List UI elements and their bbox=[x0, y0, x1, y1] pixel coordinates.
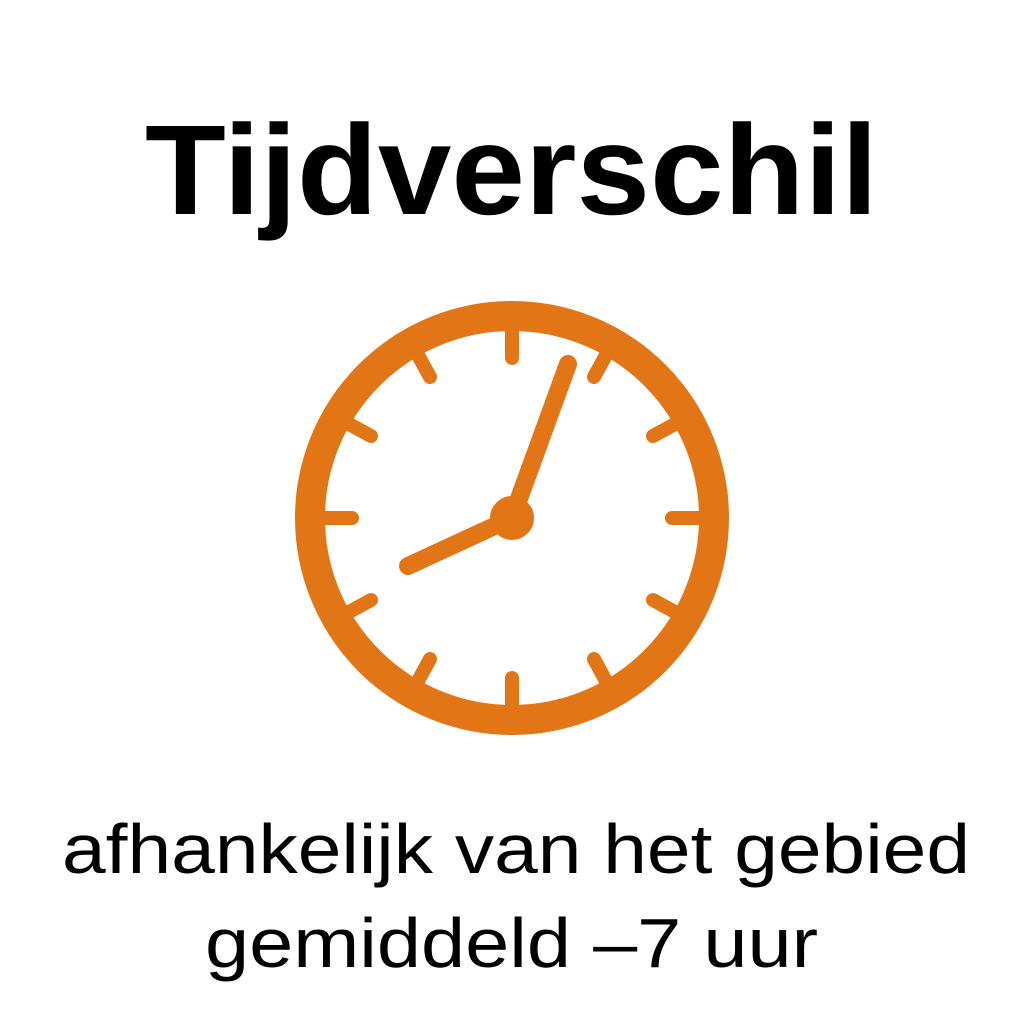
subtitle bbox=[62, 810, 970, 982]
subtitle: afhankelijk van het gebied bbox=[62, 810, 970, 888]
icon: clock bbox=[310, 316, 714, 720]
subtitle: gemiddeld –7 uur bbox=[205, 904, 818, 982]
title: Tijdverschil bbox=[145, 99, 878, 242]
